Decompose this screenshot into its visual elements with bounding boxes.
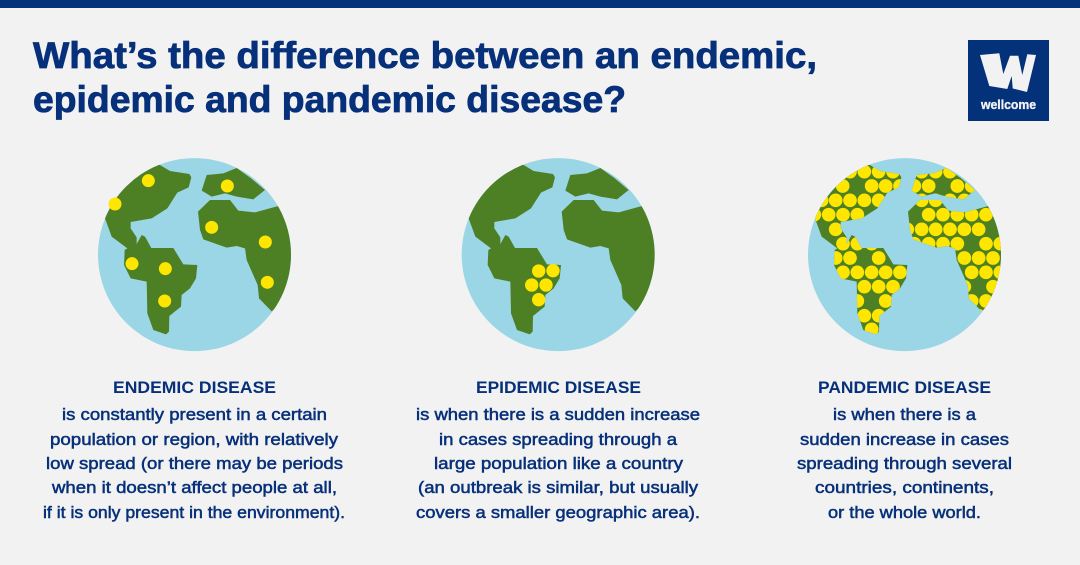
text block: endemic disease: [43, 379, 345, 522]
pandemic outbreak dots: [807, 165, 1007, 336]
globe: pandemic: [807, 157, 1013, 351]
text block: pandemic disease: is when there is a: [833, 406, 977, 424]
text block: epidemic disease: (an outbreak is similar, but usually: [418, 479, 699, 497]
logo: wellcome: wellcome: [980, 98, 1036, 112]
text block: epidemic disease: large population like a country: [434, 455, 684, 473]
title: What’s the difference between an endemic,: [33, 35, 817, 76]
text block: epidemic disease: [416, 379, 700, 522]
text block: endemic disease: ENDEMIC DISEASE: [113, 379, 276, 397]
text block: pandemic disease: PANDEMIC DISEASE: [818, 379, 991, 397]
epidemic outbreak dots: [525, 264, 560, 306]
text block: endemic disease: low spread (or there may be periods: [46, 455, 343, 473]
endemic outbreak dots: [108, 174, 274, 307]
text block: pandemic disease: spreading through several: [797, 455, 1012, 473]
top bar: [0, 0, 1080, 8]
text block: epidemic disease: EPIDEMIC DISEASE: [476, 379, 641, 397]
text block: endemic disease: if it is only present in the environment).: [43, 504, 345, 522]
text block: epidemic disease: covers a smaller geographic area).: [416, 504, 700, 522]
text block: pandemic disease: sudden increase in cases: [800, 431, 1009, 449]
text block: pandemic disease: [797, 379, 1012, 522]
text block: endemic disease: is constantly present in a certain: [62, 406, 327, 424]
globe: endemic: [97, 157, 303, 351]
text block: epidemic disease: is when there is a sudden increase: [416, 406, 700, 424]
text block: pandemic disease: countries, continents,: [815, 479, 994, 497]
text block: epidemic disease: in cases spreading through a: [439, 431, 678, 449]
text block: endemic disease: when it doesn’t affect people at all,: [51, 479, 337, 497]
title: epidemic and pandemic disease?: [33, 79, 626, 120]
text block: endemic disease: population or region, with relatively: [50, 431, 339, 449]
logo: wellcome: [968, 40, 1049, 121]
globe: epidemic: [460, 157, 667, 351]
title: [33, 35, 817, 120]
text block: pandemic disease: or the whole world.: [828, 504, 981, 522]
